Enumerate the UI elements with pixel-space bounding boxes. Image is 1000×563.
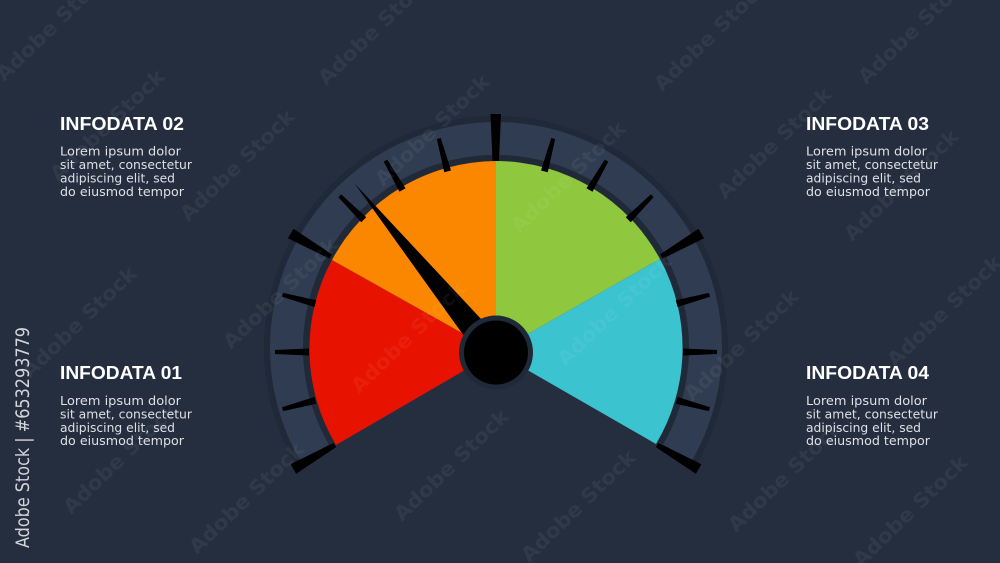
watermark pattern: Adobe Stock (712, 82, 837, 204)
hub (459, 316, 533, 390)
text block: infodata 01: do eiusmod tempor (60, 434, 184, 448)
text block: infodata 04: do eiusmod tempor (806, 434, 930, 448)
needle (355, 184, 482, 336)
sector: red (309, 260, 496, 445)
text block: infodata 03: INFODATA 03 (806, 114, 929, 134)
text block: infodata 04: sit amet, consectetur (806, 408, 938, 422)
watermark pattern: Adobe Stock (723, 415, 848, 537)
watermark pattern: Adobe Stock (839, 124, 964, 246)
text block: infodata 03: adipiscing elit, sed (806, 172, 921, 186)
text block: infodata 01: adipiscing elit, sed (60, 421, 175, 435)
text block: infodata 02: adipiscing elit, sed (60, 172, 175, 186)
watermark pattern: Adobe Stock (45, 64, 170, 186)
text block: infodata 04 (806, 363, 938, 448)
text block: infodata 03: do eiusmod tempor (806, 185, 930, 199)
watermark pattern: Adobe Stock (346, 276, 471, 398)
text block: infodata 03 (806, 114, 938, 199)
text block: infodata 04: Lorem ipsum dolor (806, 394, 927, 408)
watermark pattern: Adobe Stock (58, 397, 183, 519)
scale ticks (275, 114, 717, 474)
watermark pattern: Adobe Stock (679, 284, 804, 406)
watermark pattern: Adobe Stock (389, 404, 514, 526)
text block: infodata 04: adipiscing elit, sed (806, 421, 921, 435)
watermark pattern: Adobe Stock (175, 104, 300, 226)
watermark pattern: Adobe Stock (882, 250, 1000, 372)
text block: infodata 01: Lorem ipsum dolor (60, 394, 181, 408)
sector: green (496, 161, 660, 352)
gauge dial (264, 114, 728, 474)
watermark pattern: Adobe Stock (370, 69, 495, 191)
sector: teal (496, 259, 683, 444)
text block: infodata 02: Lorem ipsum dolor (60, 144, 181, 158)
text block: infodata 03: Lorem ipsum dolor (806, 144, 927, 158)
gauge outer dark ring (264, 116, 728, 464)
vertical stock id label: Adobe Stock | #653293779 (12, 327, 34, 548)
sector: orange (332, 161, 496, 352)
text block: infodata 01 (60, 363, 192, 448)
gauge scale band (270, 122, 722, 461)
text block: infodata 04: INFODATA 04 (806, 363, 929, 383)
text block: infodata 02: sit amet, consectetur (60, 158, 192, 172)
watermark pattern: Adobe Stock (552, 249, 677, 371)
watermark pattern: Adobe Stock (218, 232, 343, 354)
text block: infodata 02: do eiusmod tempor (60, 185, 184, 199)
text block: infodata 01: INFODATA 01 (60, 363, 182, 383)
watermark pattern: Adobe Stock (506, 116, 631, 238)
watermark pattern: Adobe Stock (17, 261, 142, 383)
text block: infodata 02: INFODATA 02 (60, 114, 184, 134)
watermark pattern: Adobe Stock (184, 437, 309, 559)
text block: infodata 01: sit amet, consectetur (60, 408, 192, 422)
text block: infodata 02 (60, 114, 192, 199)
text block: infodata 03: sit amet, consectetur (806, 158, 938, 172)
